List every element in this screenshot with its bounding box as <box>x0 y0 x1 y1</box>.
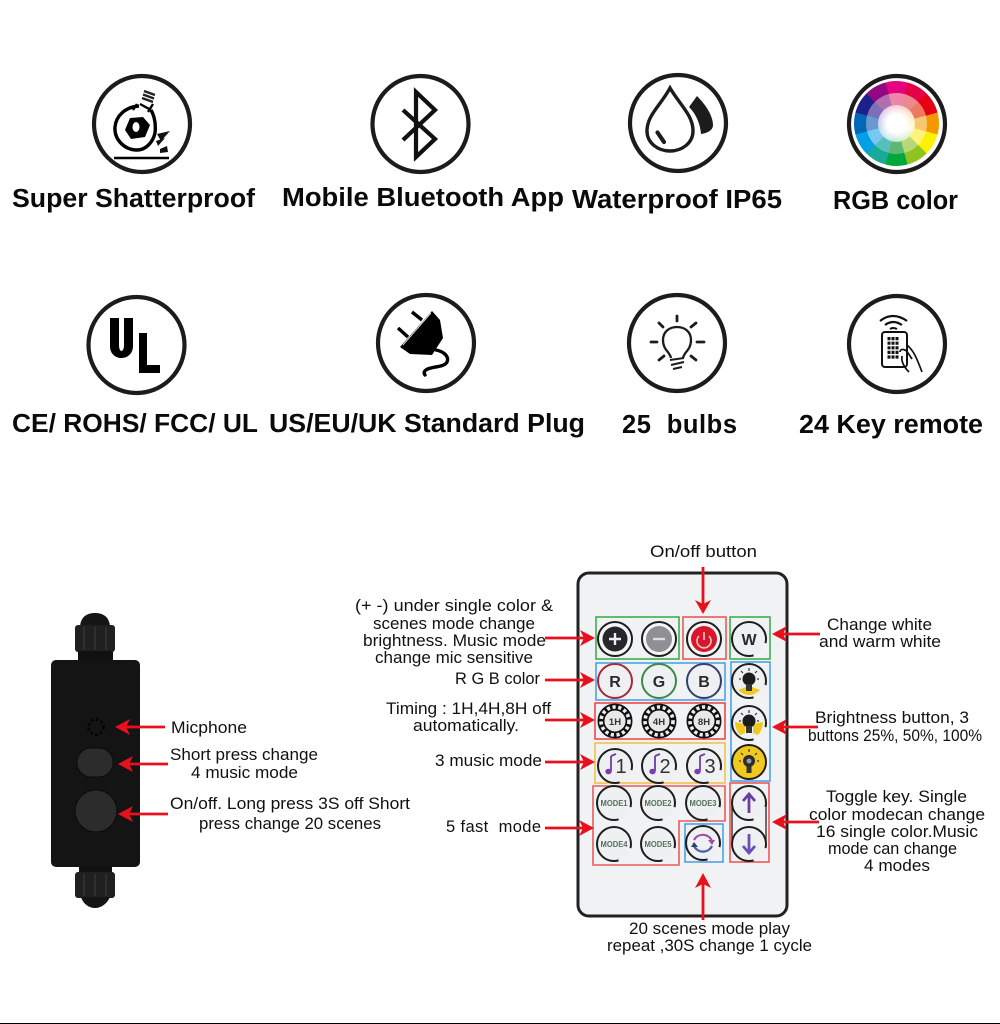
label: Micphone: Micphone <box>171 719 247 737</box>
button: B: B <box>698 674 710 691</box>
button: music 2: 2 <box>659 756 671 778</box>
label: toggle <box>809 788 985 875</box>
button: cycle <box>686 826 720 860</box>
heading: standard plug: US/EU/UK Standard Plug <box>269 410 585 438</box>
heading: 25 bulbs: 25 bulbs <box>622 411 737 439</box>
heading: Mobile Bluetooth App: Mobile Bluetooth App <box>282 184 564 212</box>
button: R <box>598 664 632 698</box>
arrow: timing <box>545 712 595 728</box>
device body <box>51 660 140 867</box>
label: scenes <box>607 920 812 955</box>
wheel: middle ring <box>866 93 927 154</box>
button: down <box>732 827 766 861</box>
arrow: white <box>772 626 820 642</box>
power button <box>75 790 117 832</box>
button: up <box>732 786 766 842</box>
button: R: R <box>609 674 621 691</box>
button: music 1 <box>598 749 632 783</box>
label: scenes: 20 scenes mode play <box>629 920 791 938</box>
label: toggle: 4 modes <box>864 857 930 875</box>
label: music mode: 3 music mode <box>435 752 542 770</box>
music mode button <box>77 748 113 777</box>
button: 4H: 4H <box>653 717 665 728</box>
label: plus minus: scenes mode change <box>373 615 535 633</box>
label: toggle: 16 single color.Music <box>816 823 978 841</box>
button: mode 3 <box>686 786 720 820</box>
label: timing: Timing : 1H,4H,8H off <box>386 700 551 718</box>
label: on/off: press change 20 scenes <box>199 815 381 833</box>
label: white: Change white <box>827 616 932 634</box>
heading: RGB color: RGB color <box>833 187 958 215</box>
label: toggle: Toggle key. Single <box>826 788 967 806</box>
label: plus minus <box>355 597 553 667</box>
label: on/off button: On/off button <box>650 543 757 561</box>
arrow: on/off button <box>695 567 711 614</box>
button: music 3: 3 <box>704 756 716 778</box>
label: timing <box>386 700 551 735</box>
arrow: plus minus <box>545 630 595 646</box>
button: W: W <box>741 632 757 649</box>
button: 8H: 8H <box>698 717 710 728</box>
heading: Super Shatterproof: Super Shatterproof <box>12 185 256 213</box>
arrow: brightness <box>772 719 818 735</box>
button: 8H <box>690 707 718 735</box>
label: RGB color: R G B color <box>455 670 540 688</box>
button: G <box>642 664 676 698</box>
label: plus minus: brightness. Music mode <box>363 632 546 650</box>
label: timing: automatically. <box>413 717 519 735</box>
button: minus <box>642 622 676 656</box>
button: mode 1 <box>597 786 631 820</box>
button: 100% brightness <box>732 745 766 779</box>
arrow: mic <box>115 719 165 735</box>
icon: remote with hand <box>849 296 945 392</box>
label: scenes: repeat ,30S change 1 cycle <box>607 937 812 955</box>
label: short press <box>170 746 318 782</box>
icon: colour wheel <box>854 81 939 166</box>
icon: shatterproof bulb <box>94 76 190 172</box>
button: mode 5: MODE5 <box>644 839 672 849</box>
label: white: and warm white <box>819 633 941 651</box>
heading: CE ROHS FCC UL: CE/ ROHS/ FCC/ UL <box>12 410 258 438</box>
panel: control box <box>51 613 140 908</box>
label: on/off: On/off. Long press 3S off Short <box>170 795 410 813</box>
label: plus minus: change mic sensitive <box>375 649 533 667</box>
top cable gland <box>75 613 115 661</box>
mic holes <box>88 720 104 734</box>
label: fast mode: 5 fast mode <box>446 818 541 836</box>
wheel: inner ring <box>878 105 915 142</box>
icon: UL mark <box>88 297 184 393</box>
button: 25% brightness <box>732 664 766 698</box>
button: plus <box>598 622 632 656</box>
arrow: short press <box>118 756 168 772</box>
button: 4H <box>645 707 673 735</box>
panel: remote control <box>578 573 787 916</box>
button: 1H: 1H <box>609 717 621 728</box>
button: power <box>687 622 721 656</box>
label: white <box>819 616 941 651</box>
button: mode 4 <box>597 827 631 861</box>
label: toggle: mode can change <box>828 840 957 858</box>
heading: Waterproof IP65: Waterproof IP65 <box>572 186 782 214</box>
frames around button groups <box>593 617 770 865</box>
label: on/off <box>170 795 410 833</box>
arrow: music mode <box>545 754 595 770</box>
arrow: on/off <box>118 806 168 822</box>
arrow: RGB color <box>545 672 595 688</box>
label: short press: Short press change <box>170 746 318 764</box>
button: music 2 <box>642 749 676 783</box>
button: 50% brightness <box>732 706 766 740</box>
label: short press: 4 music mode <box>191 764 298 782</box>
button: music 1: 1 <box>615 756 627 778</box>
label: plus minus: (+ -) under single color & <box>355 597 553 615</box>
button: mode 4: MODE4 <box>600 839 628 849</box>
label: brightness <box>808 709 982 745</box>
button: mode 2: MODE2 <box>644 798 672 808</box>
icon: light bulb <box>629 295 725 391</box>
button: mode 3: MODE3 <box>690 798 717 808</box>
icon: water drops <box>630 75 726 171</box>
button: W <box>732 622 766 656</box>
button: music 3 <box>687 749 721 783</box>
label: brightness: buttons 25%, 50%, 100% <box>808 727 982 745</box>
button: mode 2 <box>641 786 675 820</box>
button: B <box>687 664 721 698</box>
remote body <box>578 573 787 916</box>
arrow: scenes <box>695 873 711 920</box>
bottom cable gland <box>75 866 115 908</box>
label: brightness: Brightness button, 3 <box>815 709 969 727</box>
button: mode 5 <box>641 827 675 861</box>
icon: plug <box>378 295 474 391</box>
button: G: G <box>653 674 665 691</box>
button: 1H <box>601 707 629 735</box>
arrow: toggle <box>772 814 819 830</box>
label: toggle: color modecan change <box>809 806 985 824</box>
arrow: fast mode <box>545 820 594 836</box>
icon: RGB ring <box>849 76 945 172</box>
button: mode 1: MODE1 <box>600 798 628 808</box>
icon: bluetooth <box>372 76 468 172</box>
heading: 24 key remote: 24 Key remote <box>799 411 983 439</box>
